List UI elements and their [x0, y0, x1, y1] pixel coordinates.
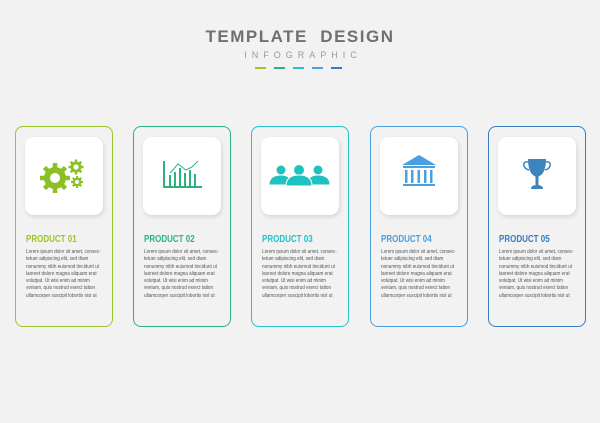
panel: product 05 [488, 126, 586, 327]
icon: people [261, 137, 339, 215]
text block: nonummy nibh euismod tincidunt ut [262, 264, 335, 270]
text block: Lorem ipsum dolor sit amet, consec- [26, 249, 101, 255]
text block: tetuer adipiscing elit, sed diam [144, 256, 206, 262]
panel: product 02 [133, 126, 231, 327]
text block: volutpat. Ut wisi enim ad minim [381, 278, 445, 284]
text block [499, 249, 574, 299]
text block: ullamcorper suscipit lobortis nisl ut [262, 293, 333, 299]
text block: ullamcorper suscipit lobortis nisl ut [26, 293, 97, 299]
text block: veniam, quis nostrud exerci tation [144, 285, 213, 291]
text block: tetuer adipiscing elit, sed diam [26, 256, 88, 262]
text block: volutpat. Ut wisi enim ad minim [26, 278, 90, 284]
text block: ullamcorper suscipit lobortis nisl ut [381, 293, 452, 299]
panel: product 04 [370, 126, 468, 327]
text block: volutpat. Ut wisi enim ad minim [144, 278, 208, 284]
text block [381, 249, 456, 299]
text block [144, 249, 219, 299]
text block: Lorem ipsum dolor sit amet, consec- [262, 249, 337, 255]
text block [262, 249, 337, 299]
text block: nonummy nibh euismod tincidunt ut [144, 264, 217, 270]
text block: veniam, quis nostrud exerci tation [381, 285, 450, 291]
text block: ullamcorper suscipit lobortis nisl ut [499, 293, 570, 299]
subtitle: INFOGRAPHIC [244, 50, 362, 60]
icon: trophy [498, 137, 576, 215]
text block: volutpat. Ut wisi enim ad minim [262, 278, 326, 284]
icon: bar chart [143, 137, 221, 215]
text block: laoreet dolore magna aliquam erat [499, 271, 570, 277]
heading: PRODUCT 01 [26, 234, 77, 245]
icon: bank [380, 137, 458, 215]
text block: nonummy nibh euismod tincidunt ut [499, 264, 572, 270]
text block: tetuer adipiscing elit, sed diam [262, 256, 324, 262]
text block: laoreet dolore magna aliquam erat [262, 271, 333, 277]
text block: volutpat. Ut wisi enim ad minim [499, 278, 563, 284]
text block: Lorem ipsum dolor sit amet, consec- [499, 249, 574, 255]
text block: nonummy nibh euismod tincidunt ut [381, 264, 454, 270]
text block: tetuer adipiscing elit, sed diam [499, 256, 561, 262]
text block: ullamcorper suscipit lobortis nisl ut [144, 293, 215, 299]
text block: veniam, quis nostrud exerci tation [26, 285, 95, 291]
title: TEMPLATE DESIGN [206, 27, 394, 46]
text block: veniam, quis nostrud exerci tation [499, 285, 568, 291]
text block: veniam, quis nostrud exerci tation [262, 285, 331, 291]
heading: PRODUCT 04 [381, 234, 432, 245]
text block: laoreet dolore magna aliquam erat [144, 271, 215, 277]
text block: laoreet dolore magna aliquam erat [26, 271, 97, 277]
text block: laoreet dolore magna aliquam erat [381, 271, 452, 277]
heading: PRODUCT 03 [262, 234, 313, 245]
text block: Lorem ipsum dolor sit amet, consec- [144, 249, 219, 255]
panel: product 03 [251, 126, 349, 327]
text block: tetuer adipiscing elit, sed diam [381, 256, 443, 262]
panel: product 01 [15, 126, 113, 327]
text block: nonummy nibh euismod tincidunt ut [26, 264, 99, 270]
text block: Lorem ipsum dolor sit amet, consec- [381, 249, 456, 255]
color dashes [255, 67, 342, 69]
icon: gears [25, 137, 103, 215]
heading: PRODUCT 02 [144, 234, 195, 245]
text block [26, 249, 101, 299]
heading: PRODUCT 05 [499, 234, 550, 245]
